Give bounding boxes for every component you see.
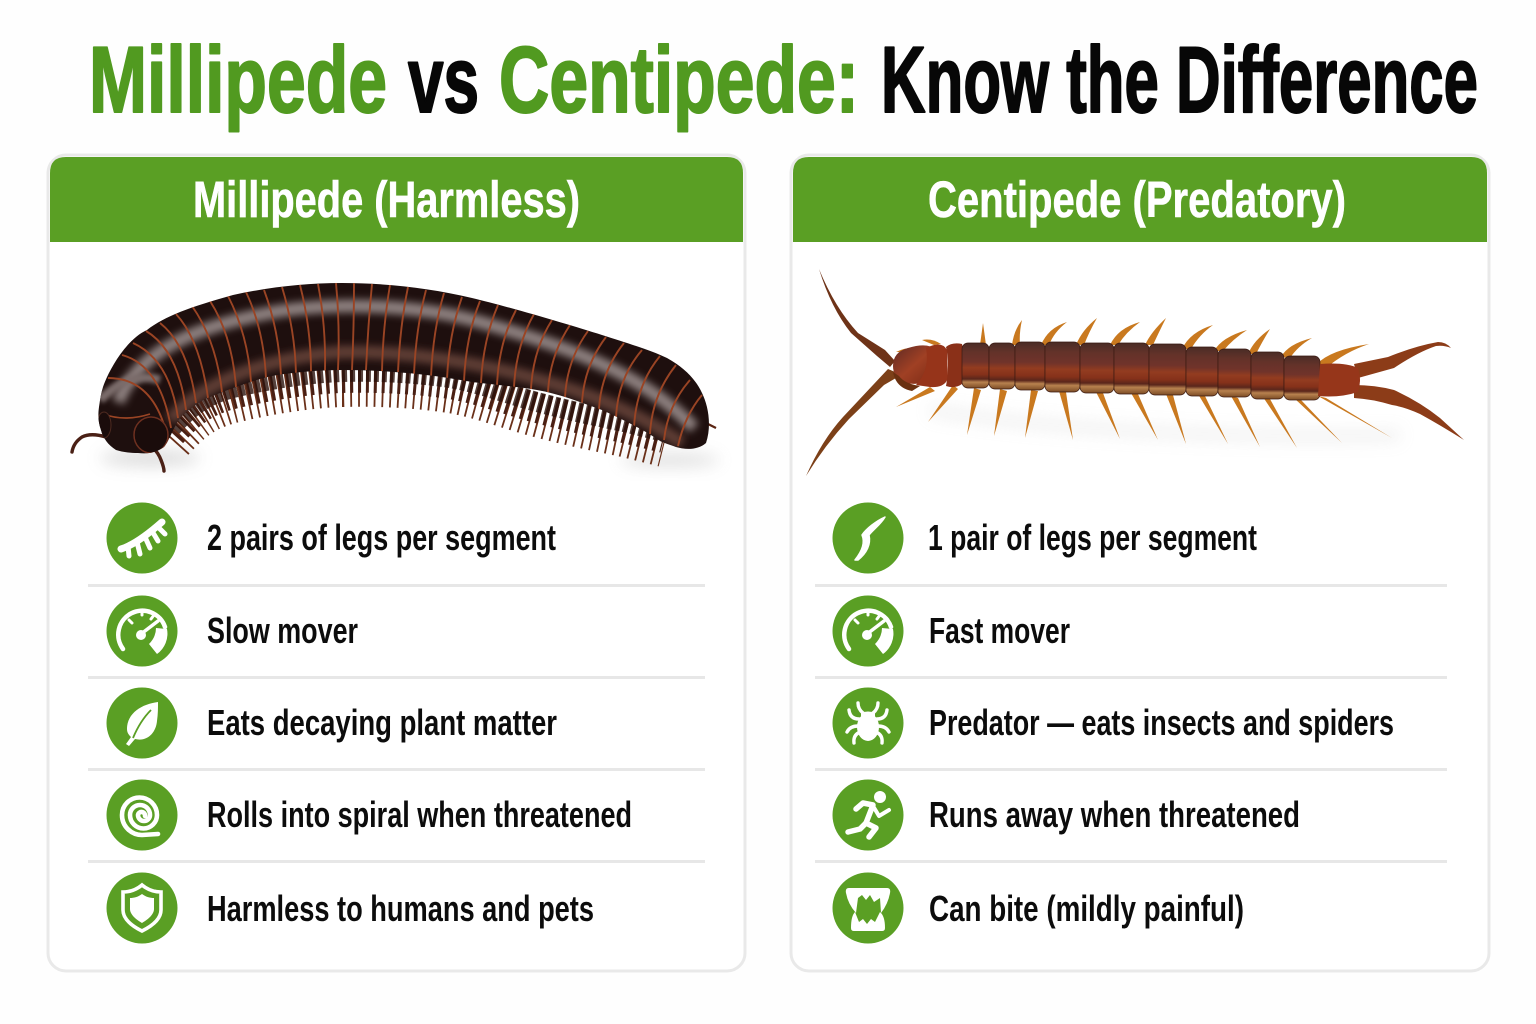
text: 1 pair of legs per segment bbox=[928, 517, 1257, 558]
row: legs bbox=[832, 502, 1257, 574]
text: Eats decaying plant matter bbox=[207, 702, 557, 743]
text: 2 pairs of legs per segment bbox=[207, 517, 556, 558]
icon: gauge bbox=[106, 596, 178, 666]
legs bbox=[896, 318, 1392, 448]
text: Slow mover bbox=[207, 610, 358, 651]
row: speed bbox=[832, 596, 1070, 666]
illustration: centipede bbox=[806, 269, 1464, 476]
header bar left bbox=[50, 157, 743, 242]
panel card left bbox=[48, 155, 745, 971]
row: bite bbox=[832, 872, 1244, 944]
row: diet bbox=[832, 688, 1394, 758]
icon: single leg bbox=[832, 502, 904, 574]
dividers right bbox=[815, 584, 1447, 863]
row: legs bbox=[106, 502, 556, 574]
panel: centipede bbox=[791, 155, 1489, 971]
head and collar bbox=[893, 345, 936, 384]
row: defence bbox=[106, 780, 632, 850]
header text left: Millipede (Harmless) bbox=[193, 171, 580, 228]
illustration: millipede bbox=[72, 275, 720, 471]
icon: bug bbox=[832, 688, 904, 758]
icon: fangs bbox=[832, 872, 904, 944]
icon: leaf bbox=[106, 688, 178, 758]
row: defence bbox=[832, 780, 1300, 850]
text: Fast mover bbox=[929, 610, 1070, 651]
icon: shield bbox=[106, 872, 178, 944]
icon: spiral bbox=[106, 780, 178, 850]
antennae bbox=[806, 269, 896, 476]
row: harmless bbox=[106, 872, 594, 944]
icon: legs comb bbox=[106, 502, 178, 574]
icon: gauge bbox=[832, 596, 904, 666]
header text right: Centipede (Predatory) bbox=[928, 171, 1346, 228]
row: speed bbox=[106, 596, 358, 666]
title: Centipede: bbox=[499, 27, 859, 132]
text: Can bite (mildly painful) bbox=[929, 888, 1244, 929]
title: vs bbox=[408, 27, 479, 132]
panel card right bbox=[791, 155, 1489, 971]
icon: runner bbox=[832, 780, 904, 850]
tail segment bbox=[1318, 364, 1360, 396]
dividers left bbox=[88, 584, 705, 863]
header bar right bbox=[793, 157, 1487, 242]
panel: millipede bbox=[48, 155, 745, 971]
title bbox=[89, 27, 1478, 132]
text: Predator — eats insects and spiders bbox=[929, 702, 1394, 743]
row: diet bbox=[106, 688, 557, 758]
text: Rolls into spiral when threatened bbox=[207, 794, 632, 835]
tail legs bbox=[1354, 342, 1464, 440]
text: Runs away when threatened bbox=[929, 794, 1300, 835]
body segments bbox=[962, 342, 1320, 400]
text: Harmless to humans and pets bbox=[207, 888, 594, 929]
title: Millipede bbox=[89, 27, 387, 132]
